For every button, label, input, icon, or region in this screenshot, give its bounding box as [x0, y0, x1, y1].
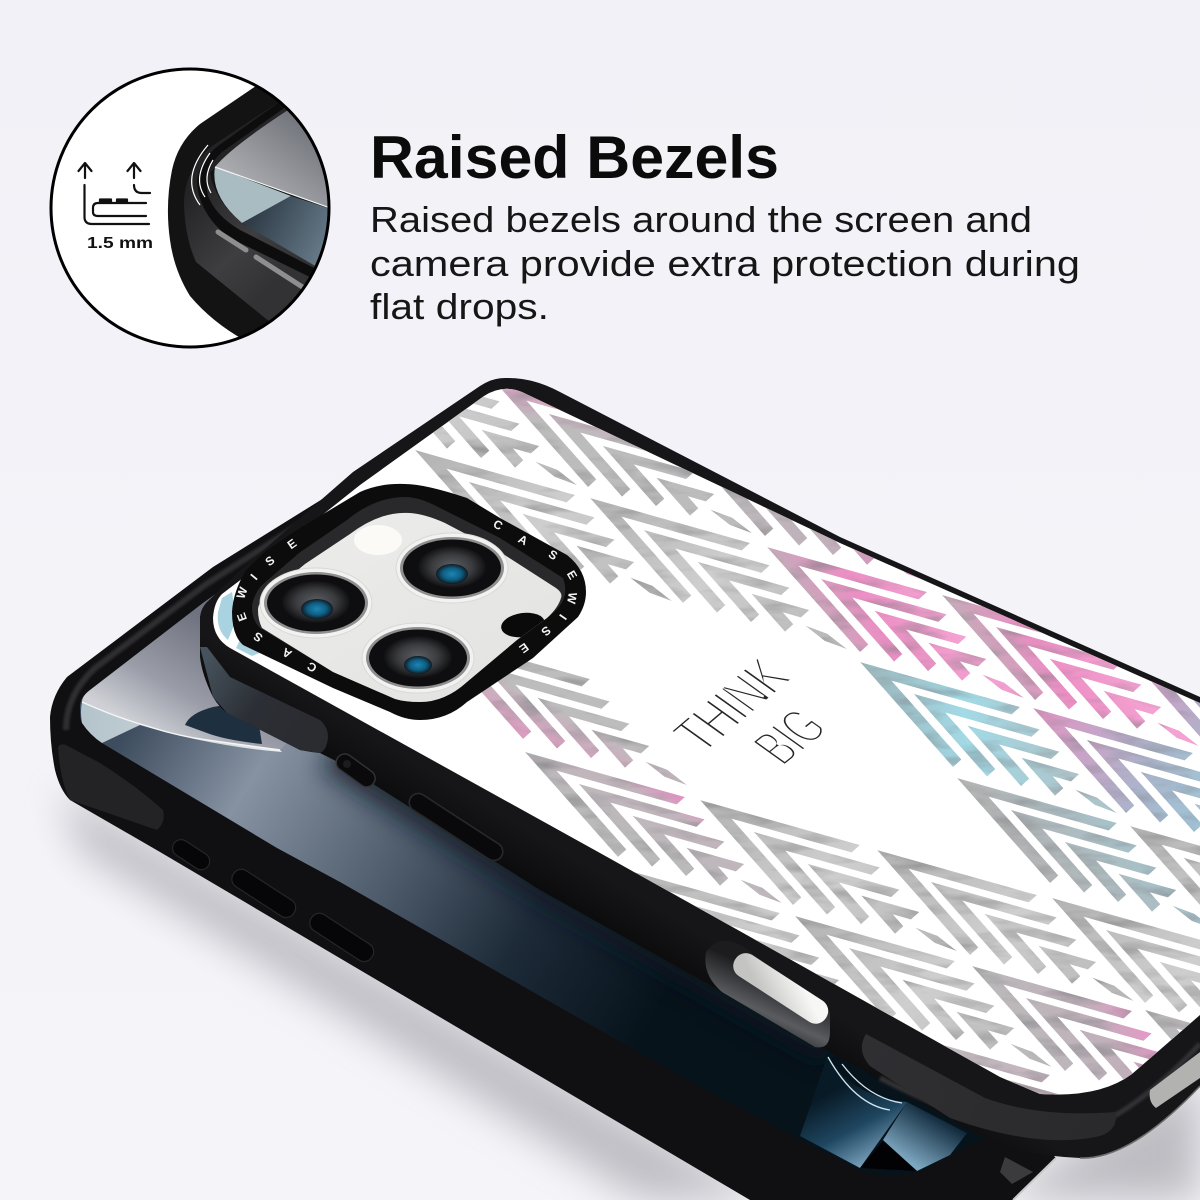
- ring branding right: C: [491, 517, 505, 533]
- camera bump ring: [232, 484, 586, 720]
- side button 1: [169, 836, 213, 873]
- ring branding left: S: [251, 629, 265, 645]
- inner bumper grey band: [184, 103, 315, 321]
- block row bottom: [634, 800, 1200, 1095]
- wallpaper right glow: [883, 1102, 967, 1171]
- white case face: [213, 389, 1200, 1095]
- ring branding left: S: [263, 553, 277, 569]
- ring branding left: A: [279, 645, 294, 661]
- BIG: BIG: [741, 700, 840, 775]
- ring branding right: S: [546, 547, 560, 563]
- lower phone translucent pad: [58, 744, 164, 830]
- flash: [354, 525, 402, 555]
- ring branding right: E: [517, 640, 531, 656]
- wallpaper blue glow: [800, 1057, 907, 1168]
- ring branding right: A: [516, 532, 530, 548]
- ring branding right: [491, 517, 580, 656]
- charging port silver pill: [729, 949, 833, 1028]
- ring branding left: I: [248, 571, 260, 583]
- lidar sensor: [501, 612, 544, 638]
- upper phone inner rim shine: [880, 1044, 1200, 1133]
- lower phone speaker: [1000, 1157, 1033, 1184]
- ring branding right: W: [564, 591, 580, 605]
- lower phone edge highlight: [1013, 1158, 1056, 1200]
- screen reflection: pale band: [81, 702, 282, 752]
- charging port recess: [705, 941, 830, 1047]
- pale blue marble slivers near camera: [218, 592, 262, 656]
- ring branding left: [233, 536, 319, 675]
- ring branding right: E: [564, 568, 580, 582]
- volume button on upper phone: [406, 790, 506, 864]
- highlight strips: [218, 232, 304, 288]
- lower phone: [50, 470, 1056, 1200]
- screen reflection: dark notch: [185, 700, 262, 744]
- lower phone screen: [80, 520, 1000, 1175]
- bezel icon: [78, 163, 150, 224]
- lens bottom: [362, 623, 474, 693]
- bumper black mass: [168, 86, 328, 337]
- description: camera provide extra protection during: [370, 243, 1080, 284]
- inset detail circle: [51, 60, 340, 347]
- upper phone body: [200, 378, 1200, 1158]
- screen reflection: white line: [82, 702, 280, 750]
- upper phone edge highlight: [1080, 1086, 1200, 1158]
- circle background: [51, 69, 329, 347]
- side button 3: [306, 910, 377, 965]
- description: flat drops.: [370, 286, 549, 327]
- block row middle: [430, 634, 1200, 977]
- description: Raised bezels around the screen and: [370, 199, 1032, 240]
- THINK: THINK: [659, 647, 804, 762]
- description: [370, 199, 1080, 327]
- think big artwork text: [659, 647, 840, 775]
- ring branding left: W: [233, 585, 251, 601]
- ring branding left: E: [285, 536, 299, 552]
- inset white reflection line: [215, 167, 330, 208]
- thickness label: 1.5 mm: [87, 235, 153, 252]
- shade from upper phone on screen: [330, 755, 830, 1050]
- lower phone bumper: [50, 470, 1056, 1200]
- ring branding left: C: [304, 659, 319, 675]
- circle outline: [51, 69, 329, 347]
- block row top: [320, 334, 1200, 794]
- ring branding right: S: [538, 623, 554, 639]
- upper left translucent pad: [200, 647, 328, 753]
- wallpaper dark triangle: [860, 1141, 917, 1171]
- speaker grille: [1150, 1052, 1200, 1108]
- wallpaper light arc: [828, 1057, 902, 1110]
- mute switch: [333, 751, 379, 790]
- inset screen dark blue: [242, 196, 328, 266]
- ring branding left: E: [234, 611, 250, 623]
- camera lens bay: [258, 513, 561, 702]
- lower right translucent pad: [862, 1034, 1116, 1140]
- title: Raised Bezels: [370, 124, 779, 191]
- ring branding right: I: [556, 612, 570, 622]
- camera module: [232, 484, 586, 720]
- inset screen pale blue: [214, 167, 291, 223]
- lower bumper sheen: [66, 498, 340, 730]
- camera inner wall: [252, 497, 565, 702]
- lens left: [260, 568, 372, 638]
- curved white arcs: [192, 145, 213, 205]
- chevron pattern: [218, 388, 1200, 1095]
- drop shadow under phones: [60, 790, 1200, 1200]
- black lip around screen: [197, 100, 322, 280]
- screen reflection: grey glass: [82, 520, 330, 750]
- invisible filter area: [200, 370, 1200, 1100]
- side button 2: [228, 866, 299, 921]
- inset bumper close-up: [168, 86, 328, 337]
- lens top right: [396, 533, 508, 603]
- inset screen grey: [215, 110, 328, 206]
- upper phone: [200, 334, 1200, 1181]
